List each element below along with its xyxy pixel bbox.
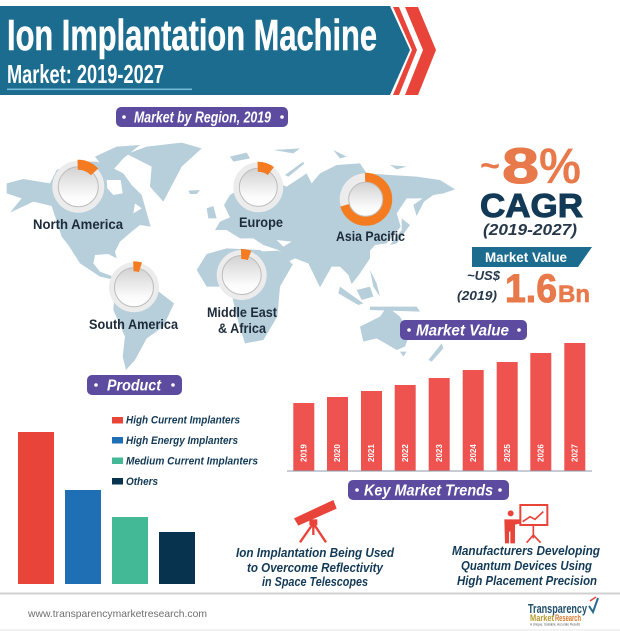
website url: www.transparencymarketresearch.com [27, 608, 207, 620]
section pill: product: Product [107, 378, 162, 394]
trend text: quantum devices: High Placement Precision [457, 574, 597, 588]
year labels [300, 444, 580, 462]
section pill: market value: Market Value [416, 322, 509, 340]
bar chart: product [18, 432, 195, 584]
logo: Transparency [528, 601, 588, 616]
label: Europe [239, 214, 283, 230]
trend text: space telescopes: to Overcome Reflectivity [247, 561, 384, 575]
trend text: quantum devices: Manufacturers Developing [452, 544, 600, 558]
donut: South America [89, 262, 178, 332]
icon: telescope [294, 500, 337, 542]
market value callout: (2019) [457, 289, 497, 303]
donut: Middle East and Africa [207, 250, 277, 336]
product legend [112, 414, 258, 488]
year labels: 2022 [401, 444, 410, 462]
label: South America [89, 316, 178, 332]
donut: Europe [233, 162, 283, 230]
trend text: quantum devices [452, 544, 600, 588]
year labels: 2023 [435, 444, 444, 462]
logo [528, 597, 598, 626]
trend text: space telescopes [236, 546, 394, 589]
logo: Market [530, 613, 554, 623]
label: Asia Pacific [336, 228, 405, 244]
CAGR callout [480, 138, 583, 239]
world map: Eurasia, Africa and Oceania [197, 148, 455, 362]
year labels: 2020 [333, 444, 342, 462]
title: Ion Implantation Machine [7, 11, 377, 60]
trend text: quantum devices: Quantum Devices Using [461, 559, 592, 573]
product legend: High Current Implanters [126, 414, 240, 426]
market value callout: ~US$ [467, 269, 501, 283]
trend text: space telescopes: in Space Telescopes [262, 575, 368, 589]
donut: Middle East and Africa: & Africa [218, 320, 266, 336]
CAGR callout: % [539, 138, 581, 194]
product legend: Medium Current Implanters [126, 456, 258, 468]
year labels: 2019 [300, 444, 308, 462]
year labels: 2027 [570, 444, 580, 462]
trend text: space telescopes: Ion Implantation Being Used [236, 546, 394, 560]
donut: North America [33, 161, 123, 232]
CAGR callout: (2019-2027) [483, 222, 577, 239]
market value callout: Market Value [485, 249, 567, 265]
CAGR callout: ~ [480, 147, 500, 185]
label: North America [33, 216, 123, 232]
section pill: market by region [116, 107, 288, 127]
label: Middle East [207, 304, 277, 320]
product legend: Others [126, 476, 158, 488]
bar chart: market value [287, 343, 592, 472]
logo: A Unique, Scalable, Accurate Results [530, 622, 580, 626]
subtitle: Market: 2019-2027 [7, 59, 164, 89]
header banner [0, 6, 436, 95]
product legend: High Energy Implanters [126, 435, 238, 447]
bars [293, 343, 585, 470]
year labels: 2021 [367, 444, 376, 462]
world map: Americas and Greenland [7, 143, 202, 370]
year labels: 2026 [536, 444, 546, 462]
market value callout: 1.6 [505, 267, 557, 311]
CAGR callout: CAGR [480, 187, 583, 224]
CAGR callout: 8 [502, 138, 539, 194]
year labels: 2025 [503, 444, 512, 462]
donut: Asia Pacific [336, 173, 405, 244]
market value callout: Bn [558, 281, 590, 308]
market value callout [457, 247, 592, 311]
section pill: key market trends: Key Market Trends [364, 482, 493, 500]
section pill: market by region: Market by Region, 2019 [134, 110, 271, 126]
logo: Research [555, 613, 581, 623]
year labels: 2024 [469, 444, 478, 462]
section pill: product [87, 375, 182, 395]
section pill: market value [400, 320, 527, 340]
icon: presenter with chart [504, 505, 547, 543]
